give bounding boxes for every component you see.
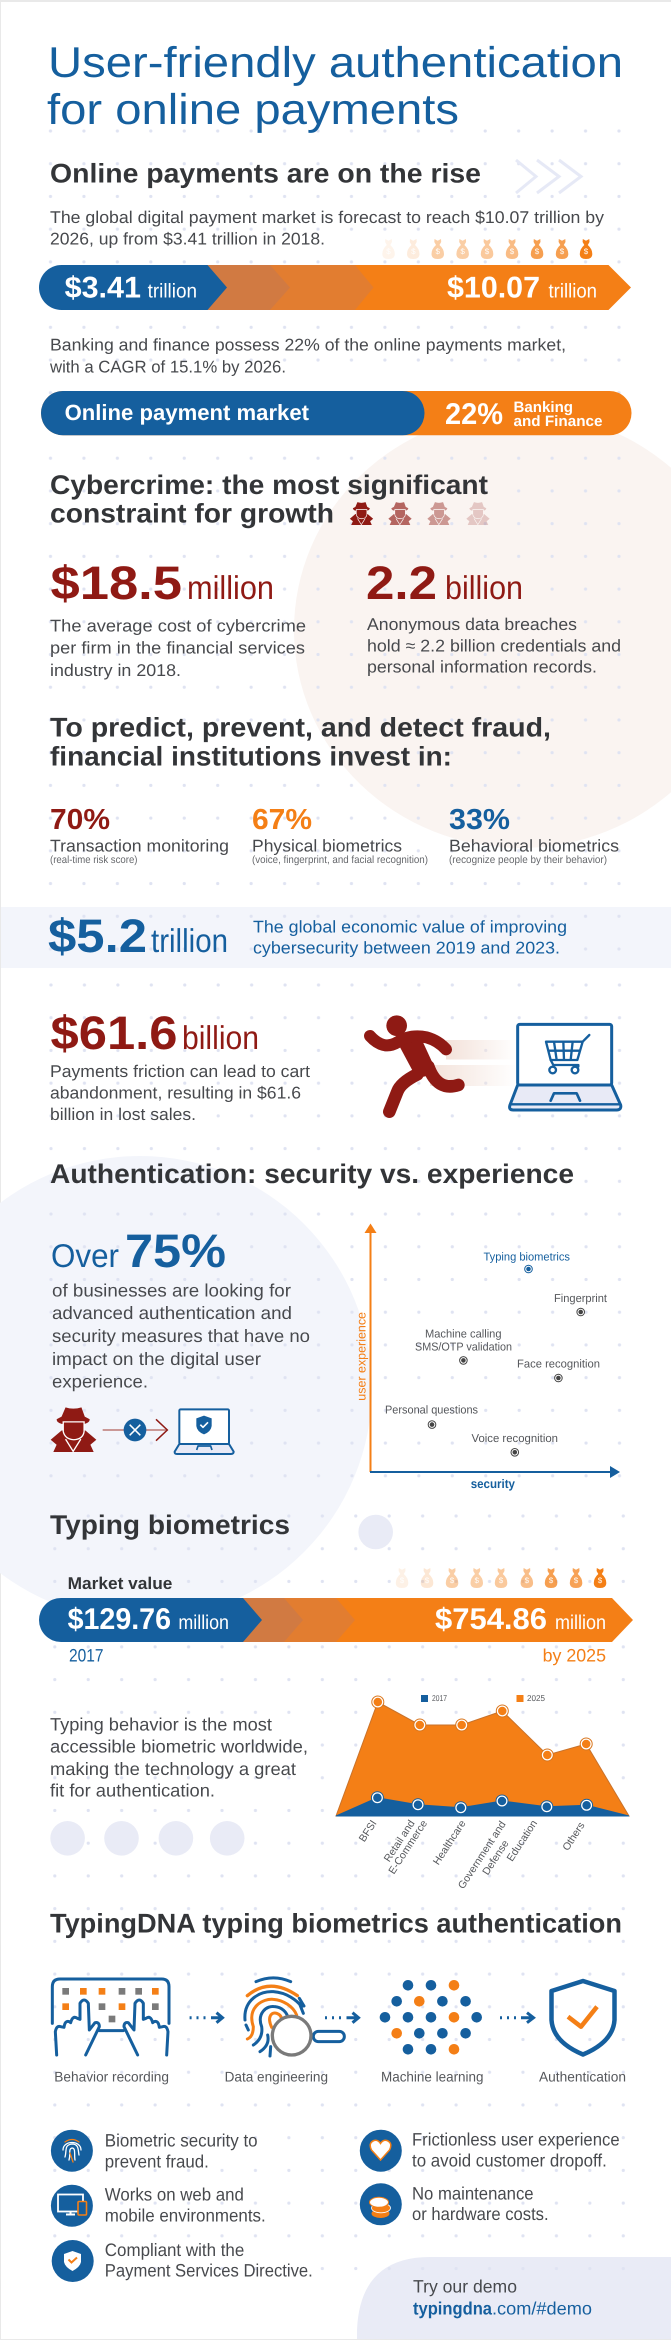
stat: 18.5 million: per firm in the financial services	[50, 639, 305, 658]
bar: online payment market share: Banking	[514, 399, 573, 416]
category labels: E-Commerce	[386, 1818, 430, 1877]
panel: benefits	[51, 2130, 620, 2282]
point: personal questions	[385, 1405, 478, 1428]
icon: chevrons	[516, 160, 581, 193]
benefit: payment services directive: Compliant with the	[105, 2240, 244, 2260]
text block: businesses: of businesses are looking for	[52, 1280, 291, 1300]
title	[47, 39, 623, 134]
icon row: money bags: $	[386, 247, 391, 256]
stat: transaction monitoring: (real-time risk score)	[50, 854, 138, 866]
callout: 5.2 trillion	[48, 909, 567, 962]
icon row: money bags: $	[485, 247, 490, 256]
bar: typing biometrics market growth: million	[555, 1612, 606, 1634]
stat: 61.6 billion: billion in lost sales.	[50, 1105, 196, 1124]
stat: 2.2 billion: 2.2	[366, 556, 437, 609]
axis label: user experience: user experience	[354, 1312, 368, 1401]
benefit: frictionless experience: Frictionless user experience	[412, 2130, 620, 2150]
icon row: money bags: $	[400, 1576, 405, 1585]
icon: protected laptop	[175, 1409, 234, 1454]
icon row: money bags: $	[560, 247, 565, 256]
icon row: money bags: $	[411, 247, 416, 256]
point: typing biometrics	[484, 1251, 570, 1273]
benefit: web and mobile: Works on web and	[105, 2185, 244, 2205]
stat: 2.2 billion: Anonymous data breaches	[367, 615, 577, 634]
text block: businesses	[52, 1280, 310, 1392]
labels: process steps: Data engineering	[225, 2069, 328, 2085]
benefit: payment services directive: Payment Services Directive.	[105, 2261, 313, 2281]
text block: market forecast	[50, 208, 605, 248]
bar: market growth arrow: $10.07	[447, 271, 540, 304]
icon row: money bags: $	[510, 247, 515, 256]
stat: 2.2 billion: billion	[445, 569, 523, 606]
benefit: biometric security: Biometric security to	[105, 2131, 258, 2151]
text block: businesses: security measures that have no	[52, 1326, 310, 1346]
point: voice recognition	[472, 1433, 558, 1456]
text block: typing behavior: accessible biometric worldwide,	[50, 1737, 308, 1757]
icon: keyboard and hands	[52, 1979, 169, 2055]
text block: typing behavior: Typing behavior is the most	[50, 1715, 272, 1735]
bar: market growth arrow: trillion	[548, 281, 597, 303]
heading: invest in: financial institutions invest in:	[50, 742, 452, 772]
stat: physical biometrics: (voice, fingerprint, and facial recognition)	[252, 854, 428, 866]
legend	[421, 1693, 545, 1703]
text block: typing behavior	[50, 1715, 308, 1801]
panel: typingdna process	[50, 1909, 626, 2085]
bar: typing biometrics market growth: million	[178, 1612, 229, 1634]
bar: online payment market share	[41, 391, 632, 435]
benefit: biometric security	[51, 2130, 258, 2172]
stat: 2.2 billion	[366, 556, 621, 677]
icon: machine learning dots	[380, 1980, 482, 2055]
stat: transaction monitoring	[50, 804, 229, 866]
legend: 2025	[527, 1693, 545, 1703]
icon row: money bags: $	[584, 247, 589, 256]
heading: online payments: Online payments are on the rise	[50, 159, 481, 189]
category labels: Others	[560, 1820, 588, 1853]
benefit: no maintenance: or hardware costs.	[412, 2204, 549, 2224]
stat: behavioral biometrics	[449, 804, 619, 866]
bar: market growth arrow: $3.41	[65, 271, 141, 304]
background circle: cybercrime	[294, 412, 671, 848]
stat: over 75 percent: Over	[51, 1237, 119, 1274]
icon: shield with check	[552, 1981, 614, 2054]
icon row: money bags: $	[574, 1576, 579, 1585]
stat: 61.6 billion: billion	[182, 1019, 259, 1056]
stat: 61.6 billion	[50, 1006, 310, 1124]
category labels: Retail and	[382, 1818, 418, 1864]
stat: over 75 percent	[51, 1224, 226, 1277]
text block: businesses: impact on the digital user	[52, 1349, 261, 1369]
benefit: frictionless experience	[360, 2130, 620, 2172]
icon row: money bags: $	[549, 1576, 554, 1585]
benefit: biometric security: prevent fraud.	[105, 2151, 209, 2171]
heading: cybercrime: constraint for growth	[50, 499, 334, 529]
benefit: no maintenance: No maintenance	[412, 2183, 534, 2203]
heading: authentication: Authentication: security vs. experience	[50, 1159, 574, 1189]
icon row: money bags: $	[460, 247, 465, 256]
text block: businesses: advanced authentication and	[52, 1303, 292, 1323]
category labels: Education	[505, 1818, 540, 1864]
benefit: payment services directive	[52, 2240, 313, 2282]
icon: fingerprint and magnifier	[245, 1978, 344, 2056]
bar: online payment market share: and Finance	[514, 413, 602, 430]
text block: banking share: Banking and finance possess 22% of the online payments market,	[50, 336, 566, 355]
category labels: BFSI	[357, 1818, 380, 1844]
labels: process steps: Machine learning	[381, 2069, 484, 2085]
text block: typing behavior: making the technology a great	[50, 1759, 296, 1779]
category labels: Defense	[480, 1838, 512, 1877]
callout: try our demo: Try our demo	[413, 2277, 517, 2297]
bar: typing biometrics market growth: $129.76	[68, 1603, 171, 1636]
heading: cybercrime: Cybercrime: the most significant	[50, 470, 488, 500]
stat: transaction monitoring: 70%	[50, 804, 110, 836]
stat: physical biometrics: 67%	[252, 804, 312, 836]
icon row: money bags: $	[425, 1576, 430, 1585]
stat: 61.6 billion: abandonment, resulting in $61.6	[50, 1084, 301, 1103]
stat: 18.5 million: The average cost of cybercrime	[50, 617, 306, 636]
title: User-friendly authentication	[48, 39, 623, 87]
stat: physical biometrics: Physical biometrics	[252, 837, 402, 856]
panel: online payments are on the rise	[39, 159, 632, 435]
icon: hacker	[51, 1407, 96, 1452]
panel: over 75 percent	[51, 1224, 310, 1454]
icon row: money bags	[382, 239, 592, 259]
bar: online payment market share: 22%	[445, 398, 503, 431]
stat: 18.5 million: $18.5	[50, 556, 182, 609]
stat: 2.2 billion: personal information records.	[367, 658, 597, 677]
stat: physical biometrics	[252, 804, 428, 866]
icon row: money bags: $	[435, 247, 440, 256]
stat: behavioral biometrics: 33%	[449, 804, 510, 836]
point: machine calling: SMS/OTP validation	[415, 1342, 512, 1354]
category labels: Healthcare	[431, 1818, 469, 1867]
bar: typing biometrics market growth: $754.86	[435, 1603, 547, 1636]
bar: market growth arrow: trillion	[148, 281, 197, 303]
callout: try our demo: .com/#demo	[492, 2298, 592, 2318]
stat: 2.2 billion: hold ≈ 2.2 billion credentials and	[367, 636, 621, 655]
icon: speed trails	[430, 1040, 517, 1086]
arrow: engineering to learning	[325, 2013, 358, 2023]
stat: behavioral biometrics: (recognize people by their behavior)	[449, 854, 607, 866]
area: 2017	[336, 1792, 629, 1816]
heading: cybercrime	[50, 470, 488, 529]
stat: 61.6 billion: $61.6	[50, 1006, 178, 1059]
text block: banking share: with a CAGR of 15.1% by 2026.	[49, 357, 286, 376]
stat: transaction monitoring: Transaction monitoring	[50, 837, 229, 856]
heading: typingdna: TypingDNA typing biometrics authentication	[50, 1909, 622, 1939]
text block: typing behavior: fit for authentication.	[50, 1781, 215, 1801]
point: personal questions: Personal questions	[385, 1405, 478, 1417]
callout: try our demo: typingdna	[413, 2298, 493, 2318]
panel: cybercrime	[50, 470, 621, 866]
axes	[364, 1224, 620, 1478]
benefit: frictionless experience: to avoid customer dropoff.	[412, 2150, 607, 2170]
label: by 2025: by 2025	[543, 1646, 606, 1666]
icon row: money bags: $	[474, 1576, 479, 1585]
icon row: hackers	[350, 502, 490, 525]
benefit: web and mobile	[51, 2185, 266, 2227]
chart: security vs user experience	[354, 1224, 620, 1491]
icon: blocked arrow	[103, 1419, 167, 1441]
band: economic value background	[1, 907, 671, 968]
background circle: authentication	[0, 1156, 372, 1620]
bar: online payment market share: Online payment market	[65, 400, 310, 425]
category labels: Government and	[456, 1819, 509, 1891]
demo panel background	[357, 2257, 671, 2339]
icon row: money bags	[396, 1568, 606, 1588]
stat: 18.5 million: industry in 2018.	[50, 661, 181, 680]
arrow: recording to engineering	[190, 2013, 222, 2023]
title: for online payments	[47, 86, 459, 134]
bar: typing biometrics market growth	[39, 1598, 633, 1642]
callout: 5.2 trillion: The global economic value of improving	[253, 918, 567, 937]
text block: banking share	[49, 336, 566, 376]
labels: process steps: Authentication	[539, 2069, 626, 2085]
icon row: money bags: $	[535, 247, 540, 256]
label: 2017: 2017	[69, 1646, 104, 1666]
heading: invest in: To predict, prevent, and detect fraud,	[50, 713, 551, 743]
panel: typing biometrics	[39, 1510, 633, 1891]
callout: 5.2 trillion: trillion	[151, 922, 228, 959]
text block: businesses: experience.	[52, 1372, 148, 1392]
axis label: security: security	[471, 1477, 515, 1491]
labels: process steps: Behavior recording	[54, 2069, 169, 2085]
stat: 61.6 billion: Payments friction can lead to cart	[50, 1062, 310, 1081]
point: face recognition	[517, 1358, 600, 1382]
decorative circle	[358, 1515, 393, 1549]
text block: market forecast: 2026, up from $3.41 trillion in 2018.	[50, 229, 325, 248]
callout: 5.2 trillion: cybersecurity between 2019 and 2023.	[253, 938, 560, 958]
icon row: money bags: $	[450, 1576, 455, 1585]
stat: over 75 percent: 75%	[125, 1224, 226, 1277]
icon row: money bags: $	[598, 1576, 603, 1585]
point: face recognition: Face recognition	[517, 1358, 600, 1370]
point: machine calling	[415, 1329, 512, 1364]
point: voice recognition: Voice recognition	[472, 1433, 558, 1445]
point: fingerprint: Fingerprint	[554, 1293, 608, 1305]
heading: typing biometrics: Typing biometrics	[50, 1510, 290, 1540]
benefit: no maintenance	[360, 2183, 549, 2225]
arrow: learning to authentication	[500, 2013, 534, 2023]
decorative circles	[50, 1821, 244, 1856]
label: market value: Market value	[68, 1574, 172, 1593]
callout: 5.2 trillion: $5.2	[48, 909, 147, 962]
panel: cart abandonment	[50, 1006, 621, 1124]
labels: process steps	[54, 2069, 626, 2085]
stat: 18.5 million	[50, 556, 306, 680]
area: 2025	[336, 1696, 629, 1816]
point: typing biometrics: Typing biometrics	[484, 1251, 570, 1263]
icon row: money bags: $	[525, 1576, 530, 1585]
bar: market growth arrow	[39, 265, 631, 310]
point: fingerprint	[554, 1293, 608, 1316]
callout: try our demo	[413, 2277, 592, 2318]
text block: market forecast: The global digital payment market is forecast to reach $10.07 trillion by	[50, 208, 605, 227]
heading: invest in	[50, 713, 551, 772]
icon row: money bags: $	[499, 1576, 504, 1585]
icon: laptop with shopping cart	[510, 1024, 621, 1110]
category labels	[357, 1818, 588, 1891]
chart: market by sector	[336, 1693, 629, 1891]
point: machine calling: Machine calling	[425, 1329, 502, 1341]
stat: 18.5 million: million	[187, 569, 274, 606]
legend: 2017	[432, 1693, 447, 1703]
benefit: web and mobile: mobile environments.	[105, 2205, 266, 2225]
icon: running person	[370, 1015, 458, 1112]
stat: behavioral biometrics: Behavioral biometrics	[449, 837, 619, 856]
